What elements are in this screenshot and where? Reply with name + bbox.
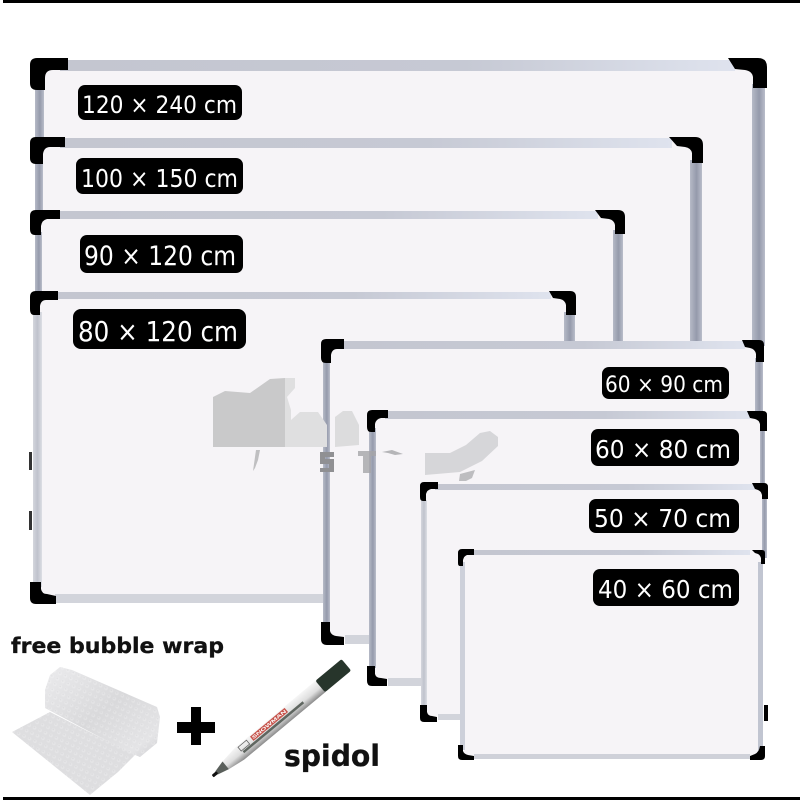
top black bar — [3, 0, 800, 3]
watermark — [213, 378, 498, 481]
size label: 40 x 60 cm: 40 × 60 cm — [598, 575, 733, 604]
size label: 120 x 240 cm: 120 × 240 cm — [82, 91, 237, 119]
bottom black bar — [3, 797, 800, 800]
board: 50 x 70 cm — [420, 482, 768, 722]
icon: bubble wrap roll — [12, 667, 160, 795]
board: 120 x 240 cm — [30, 58, 767, 352]
icon: whiteboard marker: SNOWMAN — [251, 708, 288, 740]
icon: plus sign — [177, 707, 215, 745]
icon: whiteboard marker — [208, 659, 351, 782]
board: 60 x 90 cm — [321, 339, 764, 645]
board: 40 x 60 cm — [458, 549, 765, 760]
heading: spidol: spidol — [284, 739, 380, 773]
heading: free bubble wrap: free bubble wrap — [11, 634, 224, 658]
board: 80 x 120 cm — [29, 291, 576, 604]
size label: 60 x 80 cm: 60 × 80 cm — [595, 435, 731, 464]
size label: 100 x 150 cm: 100 × 150 cm — [81, 164, 238, 193]
board: 90 x 120 cm — [30, 210, 625, 343]
board: 60 x 80 cm — [367, 410, 767, 686]
size label: 50 x 70 cm: 50 × 70 cm — [594, 504, 731, 533]
board: 100 x 150 cm — [30, 137, 703, 350]
size label: 60 x 90 cm: 60 × 90 cm — [605, 373, 723, 398]
size label: 80 x 120 cm: 80 × 120 cm — [78, 315, 238, 348]
size label: 90 x 120 cm: 90 × 120 cm — [84, 241, 236, 272]
